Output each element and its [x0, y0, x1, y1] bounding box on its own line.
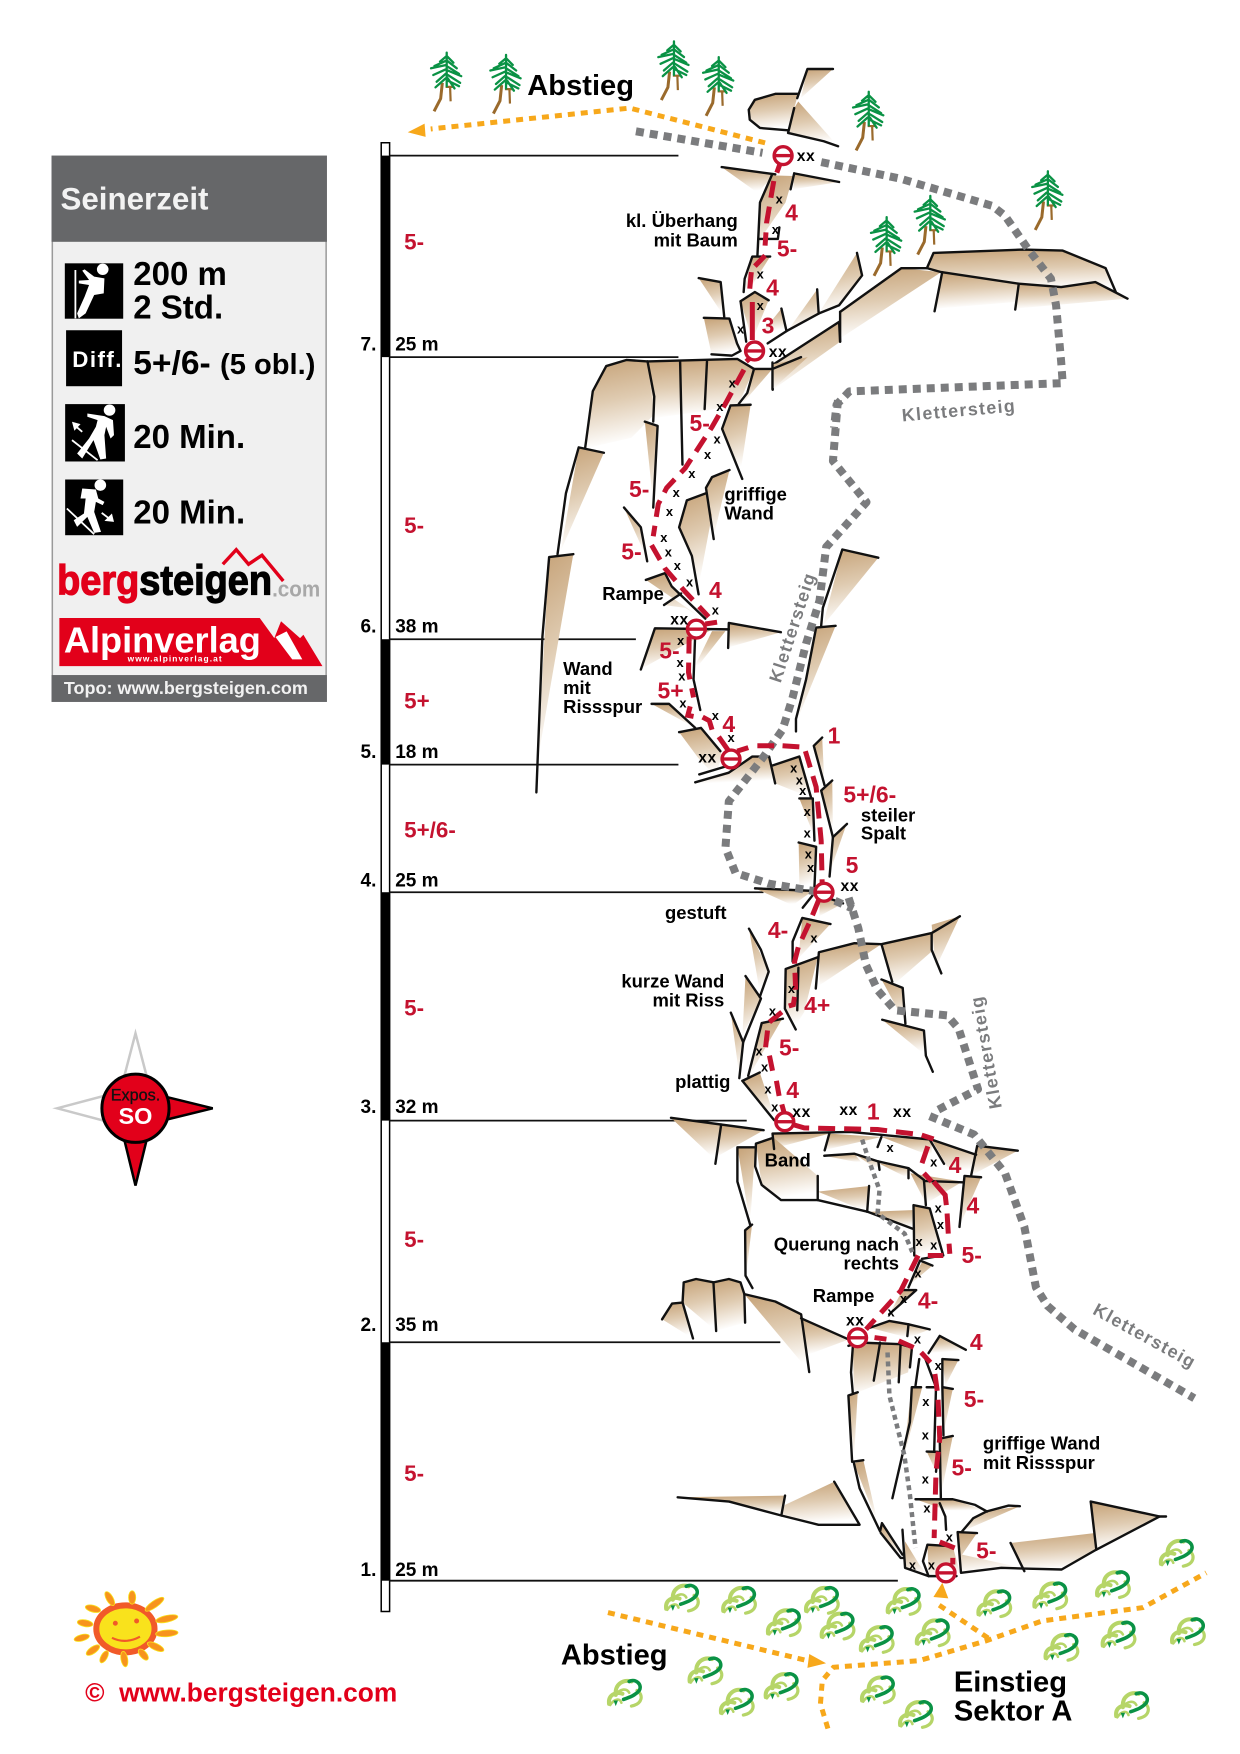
protection bolts: x — [796, 773, 804, 788]
protection bolts: x — [704, 447, 712, 462]
route grades: 5- — [962, 1242, 982, 1268]
route grades: 5- — [964, 1386, 984, 1412]
route annotations: kurze Wand — [621, 970, 724, 991]
protection bolts — [660, 192, 954, 1573]
heading: start — [954, 1667, 1072, 1728]
protection bolts: x — [679, 696, 687, 711]
pitch grades: 5- — [404, 995, 424, 1020]
rock face: base section — [678, 1336, 1166, 1576]
pitch lengths: 38 m — [395, 617, 439, 638]
route grades: 4 — [970, 1329, 983, 1355]
protection bolts: x — [790, 760, 798, 775]
route annotations: Wand — [563, 658, 613, 679]
Klettersteig labels: Klettersteig — [765, 570, 820, 685]
pitch lengths: 18 m — [395, 742, 439, 763]
protection bolts: x — [922, 1428, 930, 1443]
climbing time: 2 Std. — [133, 288, 223, 325]
Klettersteig labels: Klettersteig — [1090, 1299, 1200, 1372]
pitch grades: 5+/6- — [404, 817, 456, 842]
route upper — [746, 163, 780, 362]
protection bolts: x — [673, 485, 681, 500]
protection bolts: x — [922, 1394, 930, 1409]
climbing route — [652, 163, 955, 1565]
pitch grades — [404, 230, 456, 1486]
protection bolts: x — [677, 633, 685, 648]
icon: compass exposure: Expos. — [111, 1086, 160, 1104]
protection bolts: x — [804, 825, 812, 840]
route grades: 5+ — [658, 678, 684, 704]
route base — [875, 1338, 955, 1565]
icon: ascent — [65, 404, 125, 461]
belay 1 — [937, 1564, 955, 1582]
route annotations: mit Rissspur — [983, 1452, 1095, 1473]
protection bolts: x — [914, 1331, 922, 1346]
protection bolts: x — [729, 375, 737, 390]
Klettersteig upper — [636, 131, 1063, 428]
protection bolts: x — [772, 222, 780, 237]
double bolt anchors: xx — [797, 148, 815, 165]
route grades — [621, 200, 996, 1563]
protection bolts: x — [713, 431, 721, 446]
route grades: 4 — [966, 1193, 979, 1219]
Klettersteig labels: Klettersteig — [966, 994, 1006, 1110]
route annotations — [563, 210, 1100, 1473]
difficulty text: 5+/6- (5 obl.) — [133, 345, 315, 382]
double bolt anchors: xx — [846, 1312, 865, 1329]
logo: Alpinverlag — [59, 618, 322, 666]
footer text: Topo: www.bergsteigen.com — [64, 678, 308, 698]
pitch grades: 5- — [404, 513, 424, 538]
scale bar — [381, 143, 390, 1611]
variant lower part — [888, 1352, 916, 1548]
heading: bottom descent: Abstieg — [561, 1640, 668, 1672]
descent and approach paths — [408, 108, 1206, 1729]
protection bolts: x — [674, 558, 682, 573]
protection bolts: x — [930, 1237, 938, 1252]
protection bolts: x — [757, 298, 765, 313]
protection bolts: x — [665, 544, 673, 559]
protection bolts: x — [909, 1558, 917, 1573]
protection bolts: x — [666, 504, 674, 519]
Klettersteig labels: Klettersteig — [901, 396, 1017, 425]
double bolt anchors: xx — [698, 749, 717, 766]
approach time: 20 Min. — [133, 418, 245, 455]
protection bolts: x — [716, 399, 724, 414]
double bolt anchors: xx — [769, 344, 787, 361]
panel: route info — [52, 156, 327, 702]
length: 200 m — [133, 255, 227, 292]
route grades: 1 — [867, 1098, 880, 1124]
route grades: 4- — [768, 917, 788, 943]
route lower — [766, 900, 950, 1329]
protection bolts: x — [935, 1200, 943, 1215]
pitch numbers: 2. — [361, 1315, 376, 1336]
pitch lengths: 35 m — [395, 1315, 439, 1336]
route annotations: Spalt — [861, 823, 906, 844]
pitch lengths — [395, 334, 439, 1581]
panel background — [52, 156, 326, 701]
icon: compass exposure — [57, 1033, 213, 1186]
route annotations: Querung nach — [774, 1233, 899, 1254]
descent time: 20 Min. — [133, 493, 245, 530]
bushes — [609, 1541, 1204, 1727]
route grades: 1 — [828, 722, 841, 748]
protection bolts: x — [886, 1140, 894, 1155]
pitch lengths: 32 m — [395, 1097, 439, 1118]
double bolt anchors: xx — [839, 1102, 858, 1119]
Klettersteig labels — [765, 396, 1200, 1372]
pitch numbers: 3. — [361, 1097, 376, 1118]
pitch numbers: 5. — [361, 742, 376, 763]
route annotations: Rampe — [813, 1285, 874, 1306]
route annotations: mit Baum — [654, 229, 738, 250]
route grades: 5- — [690, 410, 710, 436]
rock face: middle section — [536, 357, 878, 916]
route grades: 4+ — [804, 992, 830, 1018]
route grades: 5 — [846, 852, 859, 878]
pitch lengths: 25 m — [395, 871, 439, 892]
protection bolts: x — [771, 1100, 779, 1115]
icon: difficulty — [66, 330, 122, 386]
route annotations: mit Riss — [652, 989, 724, 1010]
protection bolts: x — [923, 1500, 931, 1515]
route grades: 5- — [951, 1454, 972, 1480]
protection bolts: x — [937, 1217, 945, 1232]
protection bolts: x — [678, 669, 686, 684]
route: thin dotted variant — [862, 1140, 916, 1548]
pitch numbers: 4. — [361, 871, 376, 892]
route annotations: rechts — [844, 1252, 899, 1273]
protection bolts: x — [688, 466, 696, 481]
icon: climber — [65, 263, 123, 319]
protection bolts: x — [946, 1530, 954, 1545]
pitch scale — [361, 143, 898, 1611]
heading: start: Sektor A — [954, 1696, 1072, 1728]
route annotations: kl. Überhang — [626, 210, 738, 231]
route annotations: griffige — [724, 483, 787, 504]
belay 5 — [722, 750, 740, 768]
protection bolts: x — [755, 1044, 763, 1059]
rock face: lower middle section — [662, 916, 1018, 1372]
route annotations: steiler — [861, 805, 915, 826]
pitch lengths: 25 m — [395, 334, 439, 355]
route grades: 4- — [918, 1288, 938, 1314]
copyright: © www.bergsteigen.com — [85, 1678, 397, 1708]
pitch grades: 5- — [404, 1461, 424, 1486]
rock face: upper section — [699, 69, 1128, 390]
belay 8 — [774, 147, 792, 165]
protection bolts: x — [914, 1265, 922, 1280]
heading: start: Einstieg — [954, 1667, 1067, 1699]
route grades: 3 — [762, 313, 774, 339]
protection bolts: x — [737, 322, 745, 337]
route grades: 5- — [621, 539, 642, 565]
route grades: 5+/6- — [843, 782, 896, 808]
pitch grades: 5- — [404, 1227, 424, 1252]
protection bolts: x — [799, 783, 807, 798]
panel title: Seinerzeit — [60, 181, 209, 216]
route grades: 4 — [709, 577, 722, 603]
belay 6 — [687, 620, 705, 638]
protection bolts: x — [660, 530, 668, 545]
icon: compass exposure: SO — [119, 1103, 152, 1129]
icon: difficulty: Diff. — [72, 347, 121, 372]
route annotations: mit — [563, 677, 591, 698]
protection bolts: x — [804, 804, 812, 819]
pitch numbers — [361, 334, 376, 1581]
double bolt anchors: xx — [792, 1104, 811, 1121]
belay 3 — [776, 1113, 794, 1131]
pitch numbers: 6. — [361, 617, 376, 638]
bottom paths — [608, 1573, 1206, 1729]
variant upper part — [862, 1140, 912, 1252]
trees — [431, 41, 1062, 276]
protection bolts: x — [757, 267, 765, 282]
route grades: 4 — [722, 711, 735, 737]
protection bolts: x — [916, 1234, 924, 1249]
route grades: 5- — [779, 1035, 799, 1061]
route grades: 5- — [629, 476, 649, 502]
route annotations: gestuft — [665, 902, 727, 923]
protection bolts: x — [807, 860, 815, 875]
route annotations: Rampe — [602, 583, 664, 604]
icon: descent — [65, 479, 123, 535]
top descent path — [408, 108, 765, 143]
heading: top descent: Abstieg — [527, 70, 634, 102]
route grades: 4 — [786, 1077, 799, 1103]
protection bolts: x — [935, 1358, 943, 1373]
pitch lengths: 25 m — [395, 1560, 439, 1581]
logo: Alpinverlag: Alpinverlag — [64, 621, 261, 661]
logo: Alpinverlag: www.alpinverlag.at — [127, 654, 222, 664]
route middle — [652, 370, 822, 884]
route annotations: Band — [765, 1149, 811, 1170]
protection bolts: x — [888, 1305, 896, 1320]
panel footer bar — [52, 675, 327, 702]
route annotations: griffige Wand — [983, 1433, 1100, 1454]
double bolt anchors — [670, 148, 912, 1329]
belay 2 — [849, 1329, 867, 1347]
protection bolts: x — [761, 1059, 769, 1074]
route grades: 5- — [777, 235, 797, 261]
protection bolts: x — [712, 708, 720, 723]
protection bolts: x — [769, 1003, 777, 1018]
Klettersteig lower — [849, 898, 1194, 1398]
pitch numbers: 1. — [361, 1560, 376, 1581]
logo: bergsteigen: bergsteigen — [57, 557, 272, 603]
pitch numbers: 7. — [361, 334, 376, 355]
protection bolts: x — [764, 1082, 772, 1097]
belay 7 — [746, 342, 764, 360]
pitch grades: 5- — [404, 230, 424, 255]
protection bolts: x — [686, 575, 694, 590]
protection bolts: x — [930, 1154, 938, 1169]
route: Klettersteig — [636, 131, 1194, 1398]
protection bolts: x — [788, 981, 796, 996]
route annotations: plattig — [675, 1071, 730, 1092]
double bolt anchors: xx — [840, 878, 859, 895]
route grades: 5- — [976, 1537, 996, 1563]
pitch lines — [390, 156, 898, 1581]
protection bolts: x — [810, 931, 818, 946]
protection bolts: x — [805, 847, 813, 862]
route grades: 4 — [766, 275, 779, 301]
belay 4 — [815, 883, 833, 901]
protection bolts: x — [922, 1471, 930, 1486]
route grades: 5- — [659, 637, 680, 663]
pitch grades: 5+ — [404, 689, 430, 714]
protection bolts: x — [712, 603, 720, 618]
logo: bergsteigen: .com — [272, 577, 320, 602]
protection bolts: x — [727, 730, 735, 745]
route grades: 4 — [785, 200, 798, 226]
protection bolts: x — [776, 192, 784, 207]
route grades: 4 — [949, 1152, 962, 1178]
route annotations: Rissspur — [563, 696, 642, 717]
double bolt anchors: xx — [893, 1104, 912, 1121]
double bolt anchors: xx — [670, 612, 689, 629]
icon: sun — [73, 1590, 178, 1667]
protection bolts: x — [900, 1291, 908, 1306]
Klettersteig middle — [725, 400, 867, 909]
protection bolts: x — [677, 655, 685, 670]
panel header bar — [52, 156, 327, 242]
protection bolts: x — [928, 1558, 936, 1573]
route annotations: Wand — [724, 502, 774, 523]
belay stations — [687, 147, 955, 1582]
